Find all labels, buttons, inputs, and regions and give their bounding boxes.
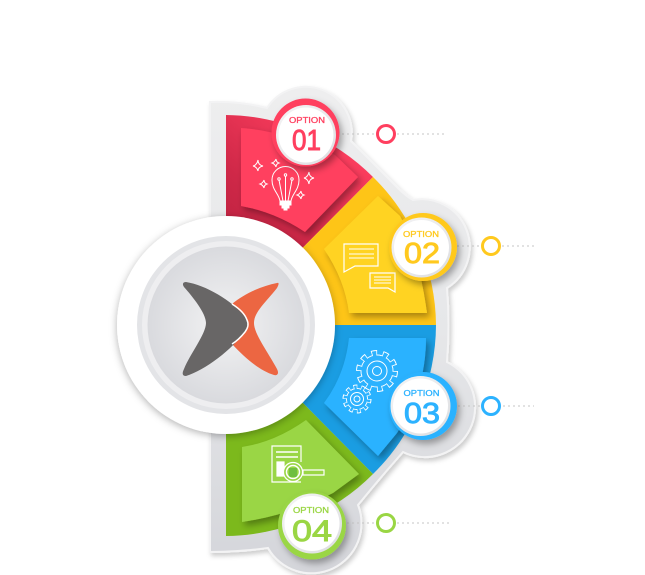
gray backing shape <box>210 87 475 573</box>
icon: light bulb with sparkles <box>253 159 314 210</box>
badge: option 01: OPTION <box>289 115 325 125</box>
badge: option 03 <box>389 372 457 440</box>
badge: option 02: OPTION <box>403 229 439 239</box>
panel: option 02 card <box>324 196 427 313</box>
badge: option 01: 01 <box>292 125 321 157</box>
logo mark <box>183 282 279 376</box>
panel: option 04 wedge <box>226 325 373 536</box>
badge: option 01 <box>272 98 340 166</box>
center logo disc <box>117 216 335 434</box>
marker: option 01 <box>378 126 394 142</box>
panel: option 03 wedge <box>226 325 436 474</box>
panel: option 03 card <box>324 338 426 456</box>
icon: document with magnifier <box>272 446 324 482</box>
marker: option 04 <box>378 514 394 532</box>
badge: option 03: OPTION <box>404 388 440 398</box>
icon: gears <box>346 354 394 410</box>
badge: option 04: OPTION <box>293 505 329 515</box>
connector lines <box>342 134 534 523</box>
marker: option 02 <box>482 238 500 254</box>
badge: option 02: 02 <box>404 238 440 270</box>
panel: option 04 card <box>242 420 359 522</box>
panel: option 01 card <box>241 128 358 232</box>
icon: speech bubbles <box>344 244 395 292</box>
badge: option 04: 04 <box>292 515 332 548</box>
marker: option 03 <box>482 398 500 414</box>
badge: option 02 <box>389 213 457 281</box>
panel: option 01 wedge <box>226 115 373 325</box>
badge: option 03: 03 <box>404 398 440 430</box>
badge: option 04 <box>278 492 346 560</box>
panel: option 02 wedge <box>226 177 436 325</box>
